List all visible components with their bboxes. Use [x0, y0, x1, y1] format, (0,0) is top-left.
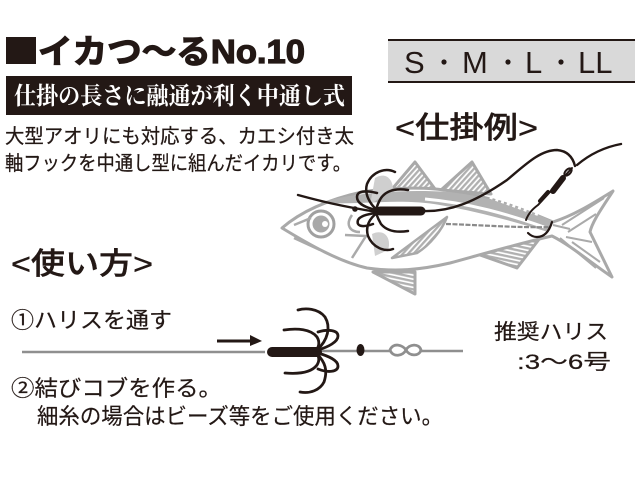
subtitle banner: 仕掛の長さに融通が利く中通し式: [14, 83, 345, 110]
step 2 text: 細糸の場合はビーズ等をご使用ください。: [37, 404, 443, 429]
recommended leader text: [494, 321, 611, 374]
heading: how to use: <使い方>: [11, 248, 153, 281]
step 2 text: [11, 376, 443, 429]
line: [22, 351, 463, 352]
pectoral fin: [392, 217, 447, 258]
fish illustration with rig: [282, 144, 621, 294]
size panel: [388, 39, 635, 83]
fish back band: [320, 191, 552, 232]
size panel: M: [462, 45, 488, 80]
eye: [308, 211, 334, 237]
treble hook: [357, 170, 421, 250]
knot: [390, 345, 421, 355]
heading: rig example: <仕掛例>: [395, 112, 538, 145]
cheek patch: [370, 176, 393, 205]
fish: [282, 162, 613, 294]
description text: 大型アオリにも対応する、カエシ付き太: [5, 125, 354, 148]
step 1 text: ①ハリスを通す: [11, 308, 172, 333]
step 2 text: ②結びコブを作る。: [11, 376, 222, 401]
description text: 軸フックを中通し型に組んだイカリです。: [5, 152, 351, 175]
description text: [5, 125, 354, 175]
belly line: [446, 224, 551, 227]
hook: [272, 309, 338, 393]
finlets: [490, 197, 540, 215]
size panel: S: [404, 45, 425, 80]
arrow: [217, 335, 262, 346]
tail hatching: [553, 198, 604, 268]
recommended leader text: :3〜6号: [517, 351, 611, 374]
bead: [356, 344, 364, 356]
usage diagram: [22, 309, 463, 393]
title: イカつ〜るNo.10: [38, 33, 305, 70]
head details: [294, 215, 366, 258]
recommended leader text: 推奨ハリス: [494, 321, 608, 344]
size panel: LL: [578, 45, 612, 80]
subtitle banner: [6, 76, 352, 115]
size panel: L: [525, 45, 542, 80]
rig line: [298, 144, 621, 237]
